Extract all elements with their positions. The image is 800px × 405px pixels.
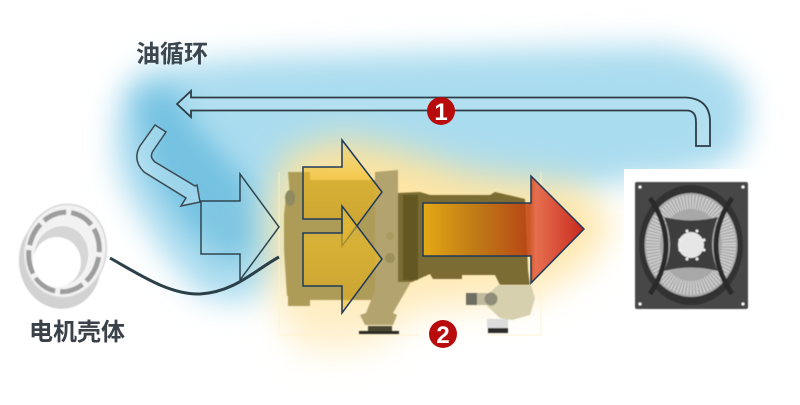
compressor	[284, 170, 530, 334]
badge 2	[429, 320, 457, 349]
arrow: air intake	[201, 174, 279, 280]
cable from housing	[110, 257, 279, 294]
arrow: motor heat lower	[303, 206, 382, 313]
compressor: flange and foot	[360, 170, 412, 325]
badge 1: 1	[434, 99, 448, 126]
compressor: gearbox	[398, 192, 530, 285]
fan image backdrop	[624, 169, 757, 322]
label: motor housing: 电机壳体	[29, 319, 125, 346]
arrow: curved oil return	[137, 125, 200, 206]
icon: motor housing	[13, 195, 116, 314]
arrow: motor heat upper	[303, 140, 382, 246]
arrow: heat output to fan	[423, 176, 584, 283]
background glow: yellow heat zone	[268, 138, 612, 352]
heading: oil circuit: 油循环	[136, 41, 208, 68]
arrow: return line to compressor inlet	[177, 91, 710, 146]
valve assembly	[466, 285, 535, 333]
icon: cooling fan	[635, 182, 748, 309]
background glow: blue oil circuit	[115, 46, 748, 302]
badge 2: 2	[436, 322, 450, 349]
badge 1	[427, 97, 455, 126]
image frame: compressor	[279, 172, 541, 335]
compressor: motor section	[284, 172, 376, 306]
